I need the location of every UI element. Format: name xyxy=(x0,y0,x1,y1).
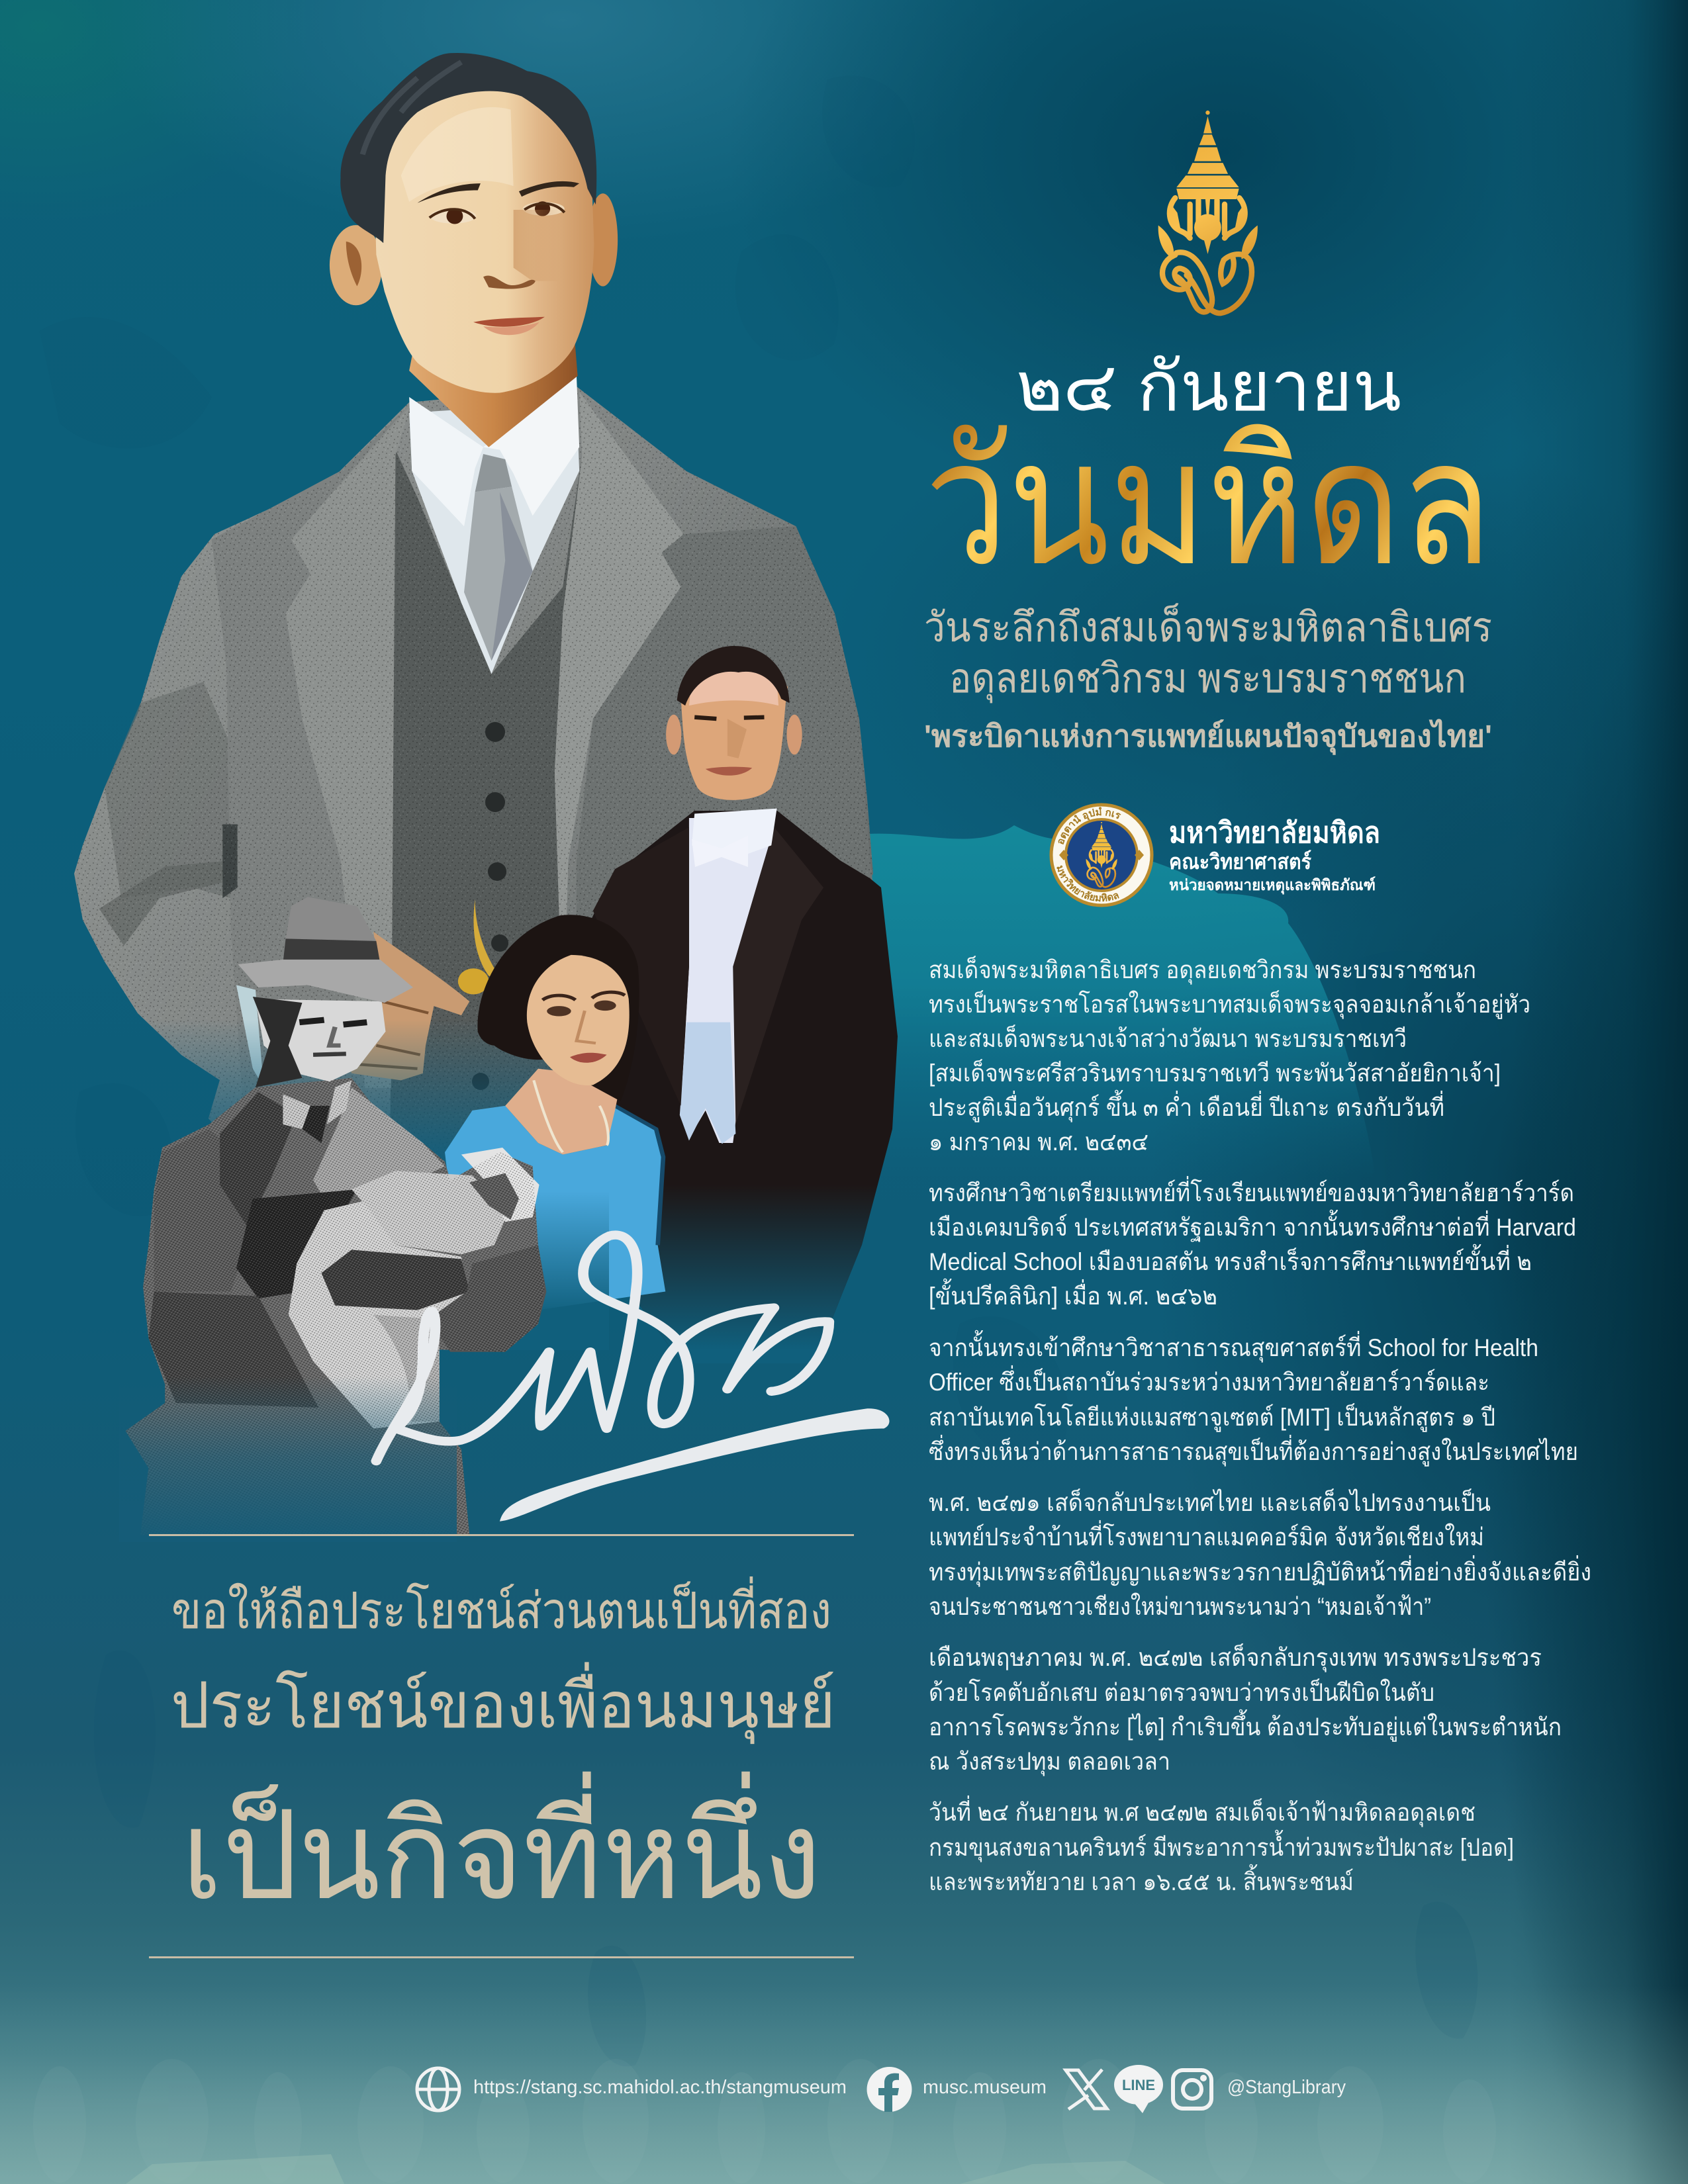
subtitle: อดุลยเดชวิกรม พระบรมราชชนก xyxy=(949,656,1466,703)
body text paragraph 1: ๑ มกราคม พ.ศ. ๒๔๓๔ xyxy=(929,1128,1149,1156)
logo text: หน่วยจดหมายเหตุและพิพิธภัณฑ์ xyxy=(1169,876,1376,895)
hat man drape and baby xyxy=(289,1199,467,1428)
portrait: man in hat holding baby xyxy=(119,897,546,1542)
date heading: ๒๔ กันยายน xyxy=(1016,349,1401,426)
body text paragraph 4 xyxy=(929,1487,1591,1620)
icon: facebook xyxy=(867,2067,912,2112)
quote block: ขอให้ถือประโยชน์ส่วนตนเป็นที่สอง xyxy=(171,1576,831,1639)
main portrait vest buttons xyxy=(472,722,508,1090)
body text paragraph 2: ทรงศึกษาวิชาเตรียมแพทย์ที่โรงเรียนแพทย์ของมหาวิทยาลัยฮาร์วาร์ด xyxy=(929,1175,1574,1206)
icon: instagram xyxy=(1173,2070,1211,2109)
hat man head xyxy=(256,999,385,1081)
tuxedo shirt xyxy=(680,818,774,1143)
icon: globe xyxy=(417,2068,459,2111)
body text paragraph 5: ด้วยโรคตับอักเสบ ต่อมาตรวจพบว่าทรงเป็นฝีบิดในตับ xyxy=(929,1677,1434,1706)
footer: facebook: musc.museum xyxy=(923,2077,1047,2098)
body text paragraph 3: สถาบันเทคโนโลยีแห่งแมสซาจูเซตต์ [MIT] เป็นหลักสูตร ๑ ปี xyxy=(929,1402,1495,1432)
footer: website xyxy=(417,2068,847,2111)
body text paragraph 1: ประสูติเมื่อวันศุกร์ ขึ้น ๓ ค่ำ เดือนยี่ ปีเถาะ ตรงกับวันที่ xyxy=(929,1089,1444,1122)
subtitle xyxy=(924,603,1492,755)
body text paragraph 5: ณ วังสระปทุม ตลอดเวลา xyxy=(929,1748,1170,1776)
footer: website: https://stang.sc.mahidol.ac.th/stangmuseum xyxy=(473,2077,847,2098)
woman neck xyxy=(505,1069,622,1155)
tuxedo head xyxy=(666,646,802,860)
logo: Mahidol University seal: อตฺตานํ อุปมํ กเร xyxy=(1058,807,1121,844)
body text paragraph 3: ซึ่งทรงเห็นว่าด้านการสาธารณสุขเป็นที่ต้องการอย่างสูงในประเทศไทย xyxy=(929,1434,1578,1467)
hat man fade xyxy=(119,1377,457,1542)
subtitle: 'พระบิดาแห่งการแพทย์แผนปัจจุบันของไทย' xyxy=(924,719,1492,755)
logo text: คณะวิทยาศาสตร์ xyxy=(1169,850,1311,874)
body text paragraph 3: Officer ซึ่งเป็นสถาบันร่วมระหว่างมหาวิทยาลัยฮาร์วาร์ดและ xyxy=(929,1365,1489,1396)
body text paragraph 6: กรมขุนสงขลานครินทร์ มีพระอาการน้ำท่วมพระปัปผาสะ [ปอด] xyxy=(929,1829,1514,1862)
tuxedo bow tie xyxy=(692,835,748,867)
body text paragraph 2 xyxy=(929,1175,1576,1310)
body text paragraph 6: วันที่ ๒๔ กันยายน พ.ศ ๒๔๗๒ สมเด็จเจ้าฟ้ามหิดลอดุลเดช xyxy=(929,1795,1476,1827)
body text paragraph 2: เมืองเคมบริดจ์ ประเทศสหรัฐอเมริกา จากนั้นทรงศึกษาต่อที่ Harvard xyxy=(929,1209,1576,1242)
quote block: ประโยชน์ของเพื่อนมนุษย์ xyxy=(171,1662,835,1745)
main portrait jacket xyxy=(74,387,878,1178)
body text paragraph 6 xyxy=(929,1795,1514,1895)
body text paragraph 1 xyxy=(929,954,1530,1156)
body text paragraph 4: จนประชาชนชาวเชียงใหม่ขานพระนามว่า “หมอเจ้าฟ้า” xyxy=(929,1592,1431,1620)
body text paragraph 4: พ.ศ. ๒๔๗๑ เสด็จกลับประเทศไทย และเสด็จไปทรงงานเป็น xyxy=(929,1487,1491,1516)
quote block: เป็นกิจที่หนึ่ง xyxy=(181,1771,821,1925)
logo: Mahidol University seal xyxy=(1050,803,1153,907)
icon: LINE xyxy=(1114,2065,1163,2113)
royal signature xyxy=(376,1235,890,1522)
body text paragraph 6: และพระหทัยวาย เวลา ๑๖.๔๕ น. สิ้นพระชนม์ xyxy=(929,1864,1354,1895)
body text paragraph 3 xyxy=(929,1330,1578,1467)
tuxedo jacket xyxy=(588,811,898,1363)
subtitle: วันระลึกถึงสมเด็จพระมหิตลาธิเบศร xyxy=(924,603,1492,651)
body text paragraph 1: ทรงเป็นพระราชโอรสในพระบาทสมเด็จพระจุลจอมเกล้าเจ้าอยู่หัว xyxy=(929,989,1530,1019)
emblem: Mahidol crown xyxy=(1158,111,1258,313)
main title: วันมหิดล xyxy=(925,406,1492,600)
body text paragraph 5: อาการโรคพระวักกะ [ไต] กำเริบขึ้น ต้องประทับอยู่แต่ในพระตำหนัก xyxy=(929,1709,1562,1742)
woman hair xyxy=(477,915,639,1101)
main portrait hand and watch fob xyxy=(236,899,502,1087)
icon: X xyxy=(1066,2070,1107,2109)
footer: facebook xyxy=(867,2067,1047,2112)
woman dress xyxy=(445,1106,665,1315)
body text paragraph 1: และสมเด็จพระนางเจ้าสว่างวัฒนา พระบรมราชเทวี xyxy=(929,1023,1407,1052)
body text paragraph 3: จากนั้นทรงเข้าศึกษาวิชาสาธารณสุขศาสตร์ที่ School for Health xyxy=(929,1330,1538,1363)
logo: Mahidol University seal: มหาวิทยาลัยมหิดล xyxy=(1056,866,1119,901)
icon: LINE: LINE xyxy=(1122,2077,1155,2093)
body text paragraph 4: ทรงทุ่มเทพระสติปัญญาและพระวรกายปฏิบัติหน้าที่อย่างยิ่งจังและดียิ่ง xyxy=(929,1555,1591,1587)
quote block xyxy=(149,1534,854,1958)
woman face xyxy=(527,955,630,1085)
body text paragraph 5 xyxy=(929,1642,1562,1776)
portrait: man in tuxedo xyxy=(588,646,898,1363)
woman fade xyxy=(437,1191,609,1350)
portrait: woman in blue dress xyxy=(437,915,665,1350)
main portrait: man in grey suit xyxy=(74,53,878,1178)
logo text xyxy=(1169,817,1380,895)
main portrait shirt and tie xyxy=(409,376,579,674)
main portrait head xyxy=(330,53,618,447)
hat man coat xyxy=(126,1078,545,1535)
body text paragraph 1: สมเด็จพระมหิตลาธิเบศร อดุลยเดชวิกรม พระบรมราชชนก xyxy=(929,954,1476,985)
body text paragraph 2: [ขั้นปรีคลินิก] เมื่อ พ.ศ. ๒๔๖๒ xyxy=(929,1278,1217,1310)
footer: handle: @StangLibrary xyxy=(1227,2077,1346,2098)
hat xyxy=(286,897,376,941)
body text paragraph 2: Medical School เมืองบอสตัน ทรงสำเร็จการศึกษาแพทย์ขั้นที่ ๒ xyxy=(929,1244,1532,1275)
body text paragraph 1: [สมเด็จพระศรีสวรินทราบรมราชเทวี พระพันวัสสาอัยยิกาเจ้า] xyxy=(929,1058,1501,1087)
body text paragraph 5: เดือนพฤษภาคม พ.ศ. ๒๔๗๒ เสด็จกลับกรุงเทพ ทรงพระประชวร xyxy=(929,1642,1542,1672)
body text paragraph 4: แพทย์ประจำบ้านที่โรงพยาบาลแมคคอร์มิค จังหวัดเชียงใหม่ xyxy=(929,1520,1484,1551)
logo text: มหาวิทยาลัยมหิดล xyxy=(1169,817,1380,849)
